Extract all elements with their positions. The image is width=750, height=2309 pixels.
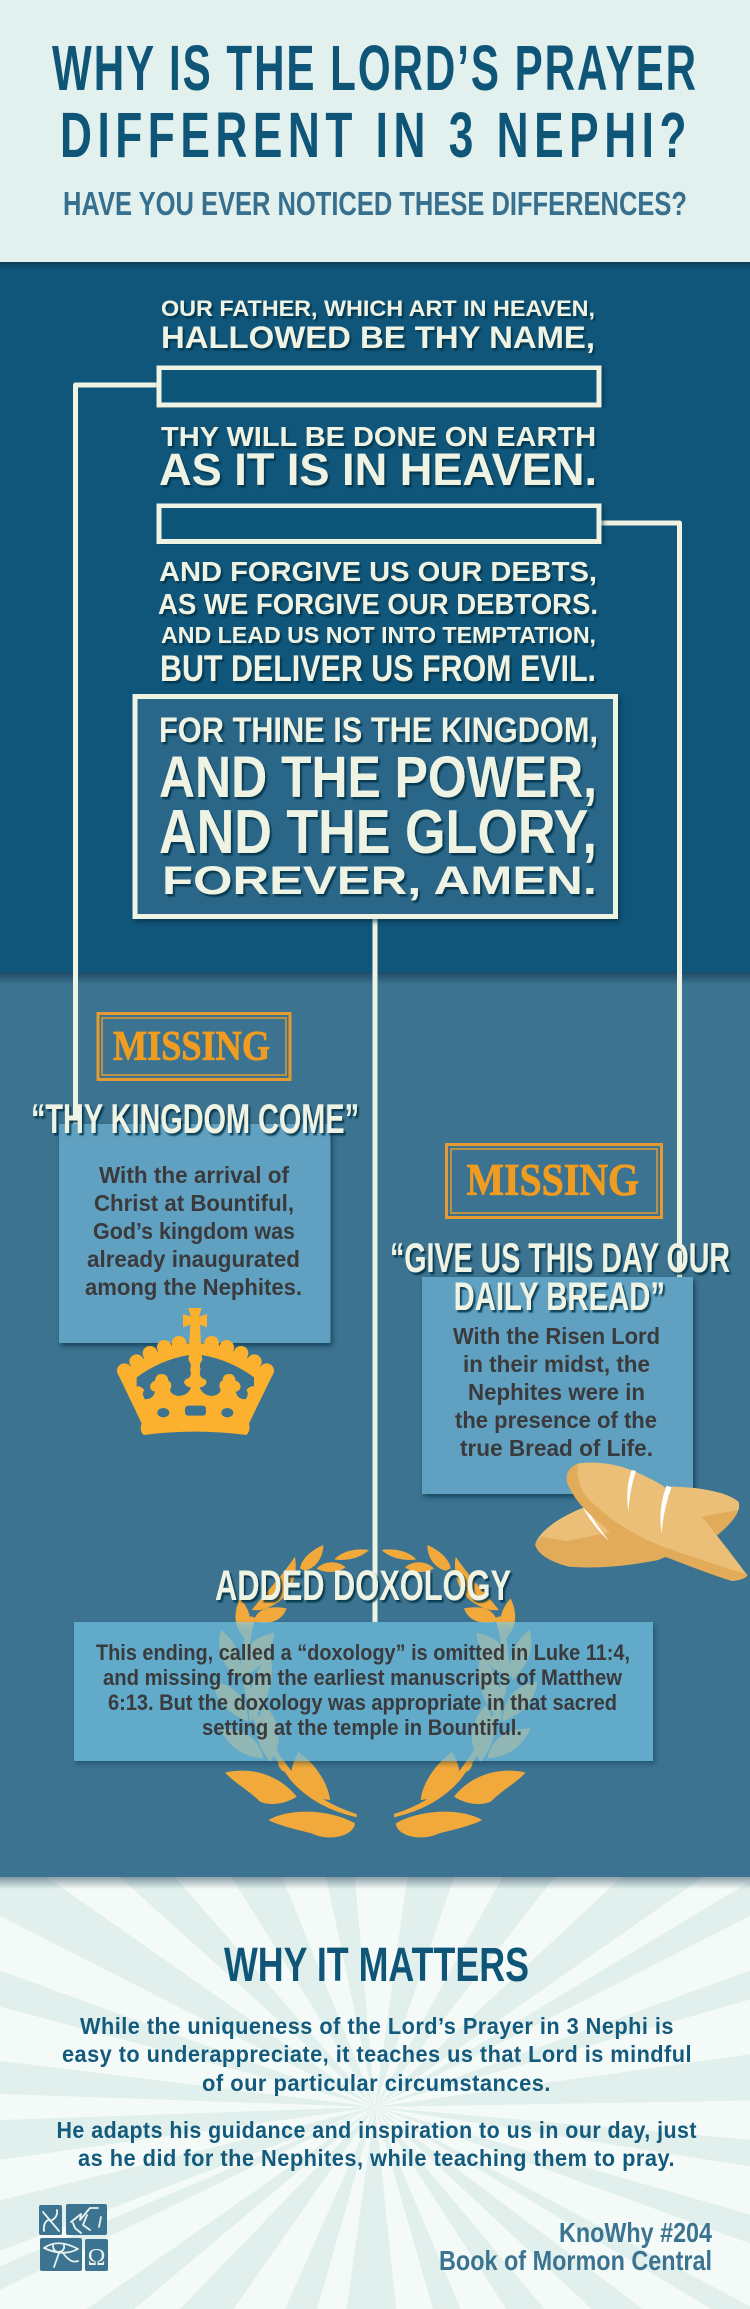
- card: daily bread: [422, 1277, 693, 1494]
- icon: book of mormon central logo: Ω: [88, 2245, 105, 2271]
- panel: why it matters sunburst background: [0, 1877, 750, 2309]
- icon: book of mormon central logo: [39, 2204, 108, 2271]
- prayer text: forgive and deliver: AND LEAD US NOT INTO TEMPTATION,: [161, 622, 596, 648]
- prayer text: opening lines: HALLOWED BE THY NAME,: [161, 319, 595, 355]
- stamp: missing right: [446, 1144, 662, 1218]
- icon: crown: [117, 1308, 274, 1435]
- stamp: missing right: MISSING: [466, 1155, 639, 1205]
- empty box: missing line one: [159, 368, 599, 405]
- connector overlay: center line above wreath: [372, 1530, 378, 1622]
- card: added doxology: 6:13. But the doxology was appropriate in that sacred: [108, 1690, 617, 1715]
- heading: why it matters: WHY IT MATTERS: [224, 1939, 529, 1992]
- credit text: KnoWhy #204: [559, 2217, 712, 2248]
- heading: give us this day our daily bread: DAILY BREAD”: [454, 1275, 665, 1319]
- icon: laurel wreath: [213, 1545, 537, 1837]
- connector: center line to doxology: [372, 919, 378, 1622]
- stamp: missing left: MISSING: [113, 1024, 270, 1070]
- card: thy kingdom come: among the Nephites.: [85, 1274, 302, 1300]
- heading: thy kingdom come: “THY KINGDOM COME”: [31, 1095, 359, 1142]
- card: added doxology: [74, 1622, 653, 1761]
- prayer text: forgive and deliver: AS WE FORGIVE OUR DEBTORS.: [158, 589, 598, 621]
- card: daily bread: Nephites were in: [468, 1379, 645, 1405]
- card: added doxology: setting at the temple in Bountiful.: [202, 1715, 522, 1740]
- connector: right line to daily bread: [601, 523, 680, 1277]
- prayer text: doxology: FOREVER, AMEN.: [162, 859, 597, 903]
- card: thy kingdom come: already inaugurated: [87, 1246, 300, 1272]
- card: thy kingdom come: Christ at Bountiful,: [94, 1190, 294, 1216]
- prayer text: forgive and deliver: AND FORGIVE US OUR DEBTS,: [159, 556, 597, 587]
- card: added doxology: and missing from the earliest manuscripts of Matthew: [103, 1665, 623, 1690]
- panel: header background: [0, 0, 750, 262]
- prayer text: forgive and deliver: BUT DELIVER US FROM EVIL.: [160, 648, 596, 689]
- text block: why it matters first paragraph: of our particular circumstances.: [202, 2070, 551, 2096]
- card: daily bread: the presence of the: [455, 1407, 657, 1433]
- card: daily bread: in their midst, the: [463, 1351, 650, 1377]
- card: thy kingdom come: God’s kingdom was: [93, 1218, 295, 1244]
- title: [52, 32, 698, 171]
- text block: why it matters second paragraph: as he did for the Nephites, while teaching them to pray.: [78, 2145, 675, 2171]
- card: daily bread: true Bread of Life.: [460, 1435, 653, 1461]
- prayer text: opening lines: OUR FATHER, WHICH ART IN HEAVEN,: [161, 296, 595, 321]
- card: daily bread: With the Risen Lord: [453, 1323, 660, 1349]
- icon: bread: [535, 1463, 748, 1581]
- prayer text: thy will: THY WILL BE DONE ON EARTH: [161, 421, 596, 452]
- prayer text: thy will: AS IT IS IN HEAVEN.: [159, 444, 597, 495]
- connector: left line to thy kingdom come: [76, 385, 157, 1124]
- card: thy kingdom come: [59, 1124, 330, 1343]
- panel: explanations background: [0, 972, 750, 1877]
- heading: added doxology: ADDED DOXOLOGY: [215, 1562, 511, 1610]
- prayer text: opening lines: [161, 296, 595, 355]
- text block: why it matters second paragraph: He adapts his guidance and inspiration to us in our day, just: [56, 2117, 697, 2143]
- prayer text: doxology: AND THE POWER,: [159, 745, 597, 810]
- stamp: missing left: [98, 1014, 290, 1080]
- text block: why it matters first paragraph: [62, 2013, 692, 2096]
- prayer text: thy will: [159, 421, 597, 495]
- card: thy kingdom come: With the arrival of: [99, 1162, 289, 1188]
- credit text: [439, 2217, 712, 2276]
- prayer text: doxology: [159, 710, 598, 903]
- heading: give us this day our daily bread: [390, 1234, 730, 1319]
- doxology box: [135, 696, 616, 916]
- empty box: missing line two: [159, 506, 599, 542]
- prayer text: doxology: AND THE GLORY,: [159, 798, 597, 867]
- text block: why it matters first paragraph: easy to underappreciate, it teaches us that Lord is mindful: [62, 2041, 692, 2067]
- text block: why it matters second paragraph: [56, 2117, 697, 2171]
- prayer text: doxology: FOR THINE IS THE KINGDOM,: [159, 710, 598, 750]
- card: added doxology: This ending, called a “doxology” is omitted in Luke 11:4,: [96, 1640, 630, 1665]
- text block: why it matters first paragraph: While the uniqueness of the Lord’s Prayer in 3 Nephi is: [80, 2013, 674, 2039]
- panel: prayer background: [0, 262, 750, 972]
- prayer text: forgive and deliver: [158, 556, 598, 689]
